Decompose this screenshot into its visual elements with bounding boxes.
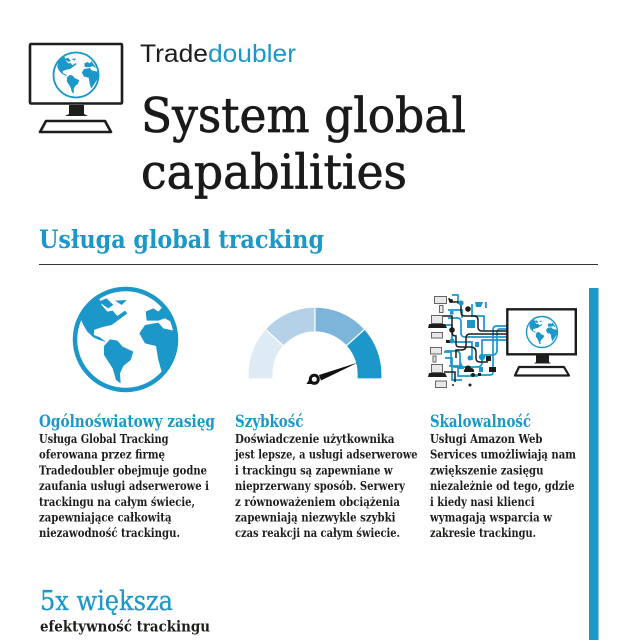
body text: zapewniające całkowitą <box>39 510 172 524</box>
body text: zwiększenie zasięgu <box>430 463 544 477</box>
body text <box>39 432 209 540</box>
icon: monitor with globe <box>30 44 122 132</box>
title: System global <box>141 88 466 144</box>
column: speed <box>234 412 418 540</box>
column: worldwide reach <box>39 412 215 540</box>
subheading: Ogólnoświatowy zasięg <box>39 412 215 431</box>
body text: nieprzerwany sposób. Serwery <box>235 479 406 493</box>
title <box>141 88 466 200</box>
column: scalability <box>429 412 576 540</box>
body text: Services umożliwiają nam <box>430 448 576 462</box>
stat caption: efektywność trackingu <box>40 618 210 636</box>
body text: Usługi Amazon Web <box>430 432 542 446</box>
logo: Tradedoubler: Tradedoubler <box>140 40 296 68</box>
body text: trackingu na całym świecie, <box>39 495 195 509</box>
body text <box>429 432 576 540</box>
body text: z równoważeniem obciążenia <box>235 495 400 509</box>
body text: i kiedy nasi klienci <box>430 495 535 509</box>
icon: network of devices connected to monitor <box>428 295 576 388</box>
gauge chart <box>248 307 382 384</box>
body text: niezawodność trackingu. <box>39 526 180 540</box>
body text: zapewniają niezwykle szybki <box>235 510 396 524</box>
stat value: 5x większa <box>40 586 173 617</box>
icon: globe <box>75 289 180 390</box>
stat: 5x greater <box>40 586 210 636</box>
body text: Doświadczenie użytkownika <box>235 432 395 446</box>
subheading: Szybkość <box>235 412 304 431</box>
body text: wymagają wsparcia w <box>429 510 552 524</box>
sidebar bar <box>589 288 598 640</box>
body text: niezależnie od tego, gdzie <box>430 479 575 493</box>
section heading: Usługa global tracking <box>39 225 324 255</box>
body text: oferowana przez firmę <box>39 448 165 462</box>
body text <box>234 432 418 540</box>
subheading: Skalowalność <box>430 412 531 431</box>
body text: jest lepsze, a usługi adserwerowe <box>234 448 418 462</box>
body text: zakresie trackingu. <box>430 526 536 540</box>
title: capabilities <box>141 144 407 200</box>
body text: zaufania usługi adserwerowe i <box>39 479 209 493</box>
body text: i trackingu są zapewniane w <box>235 463 393 477</box>
body text: Usługa Global Tracking <box>39 432 169 446</box>
gauge needle <box>306 362 358 384</box>
body text: Tradedoubler obejmuje godne <box>39 463 207 477</box>
body text: czas reakcji na całym świecie. <box>235 526 400 540</box>
